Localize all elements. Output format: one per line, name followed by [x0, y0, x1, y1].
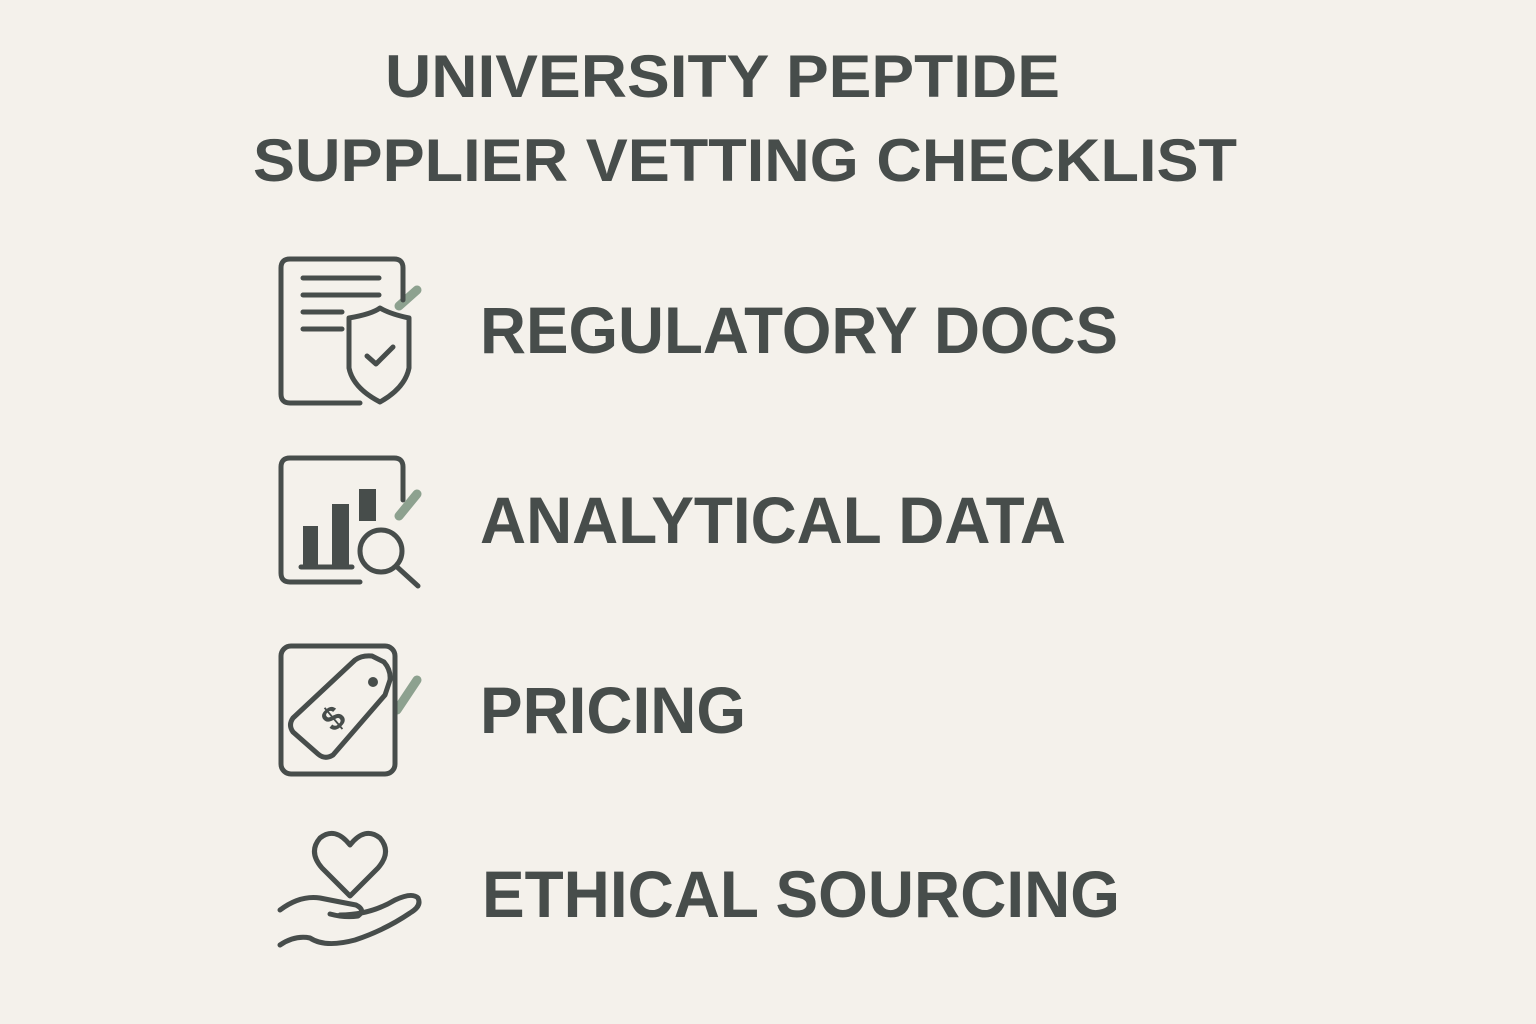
icon: hand with heart [280, 833, 419, 945]
icon: price tag: $ [314, 698, 353, 739]
item: analytical data [281, 458, 1066, 586]
icon: document with shield [281, 259, 417, 403]
label: ETHICAL SOURCING [482, 857, 1120, 931]
title: SUPPLIER VETTING CHECKLIST [253, 127, 1237, 194]
item: pricing [281, 646, 746, 774]
icon: price tag [281, 646, 417, 774]
title [253, 43, 1237, 194]
title: UNIVERSITY PEPTIDE [385, 43, 1060, 110]
item: regulatory docs [281, 259, 1118, 403]
label: PRICING [480, 673, 746, 747]
icon: chart with magnifier [281, 458, 418, 586]
label: REGULATORY DOCS [480, 293, 1118, 367]
item: ethical sourcing [280, 833, 1120, 945]
label: ANALYTICAL DATA [480, 483, 1066, 557]
